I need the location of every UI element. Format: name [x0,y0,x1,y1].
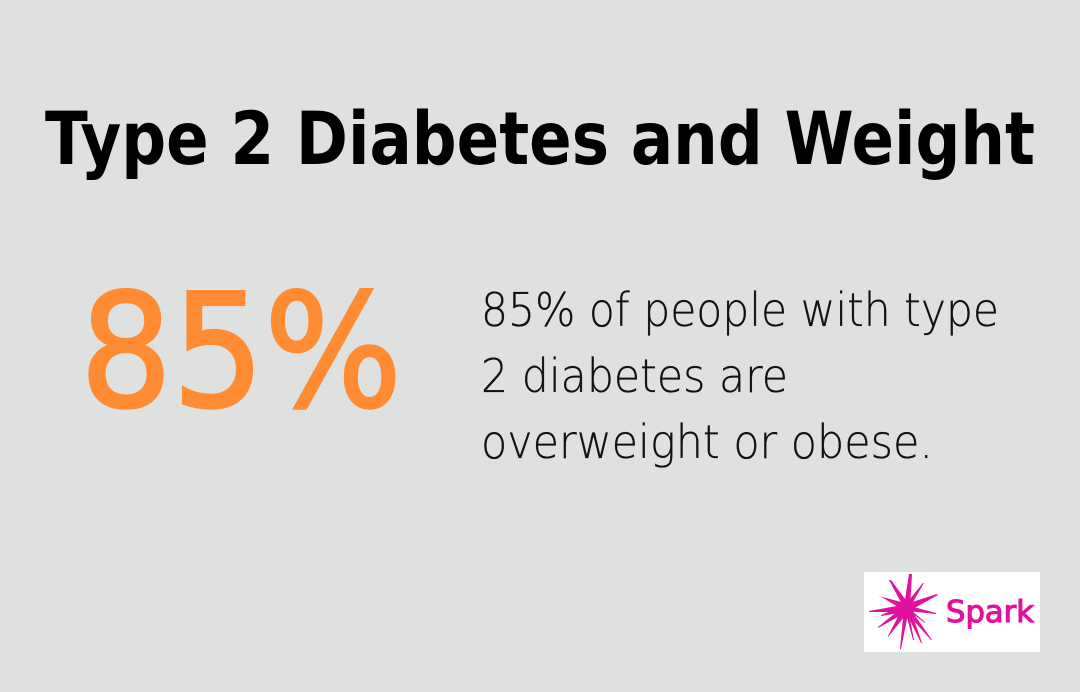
big statistic: 85%: 85% [80,261,402,444]
description text [481,283,999,469]
description text: overweight or obese. [481,415,933,469]
logo: Spark [864,572,1040,652]
logo wordmark: Spark [946,595,1035,630]
description text: 85% of people with type [481,283,999,337]
icon: starburst [869,574,938,649]
description text: 2 diabetes are [481,349,788,403]
